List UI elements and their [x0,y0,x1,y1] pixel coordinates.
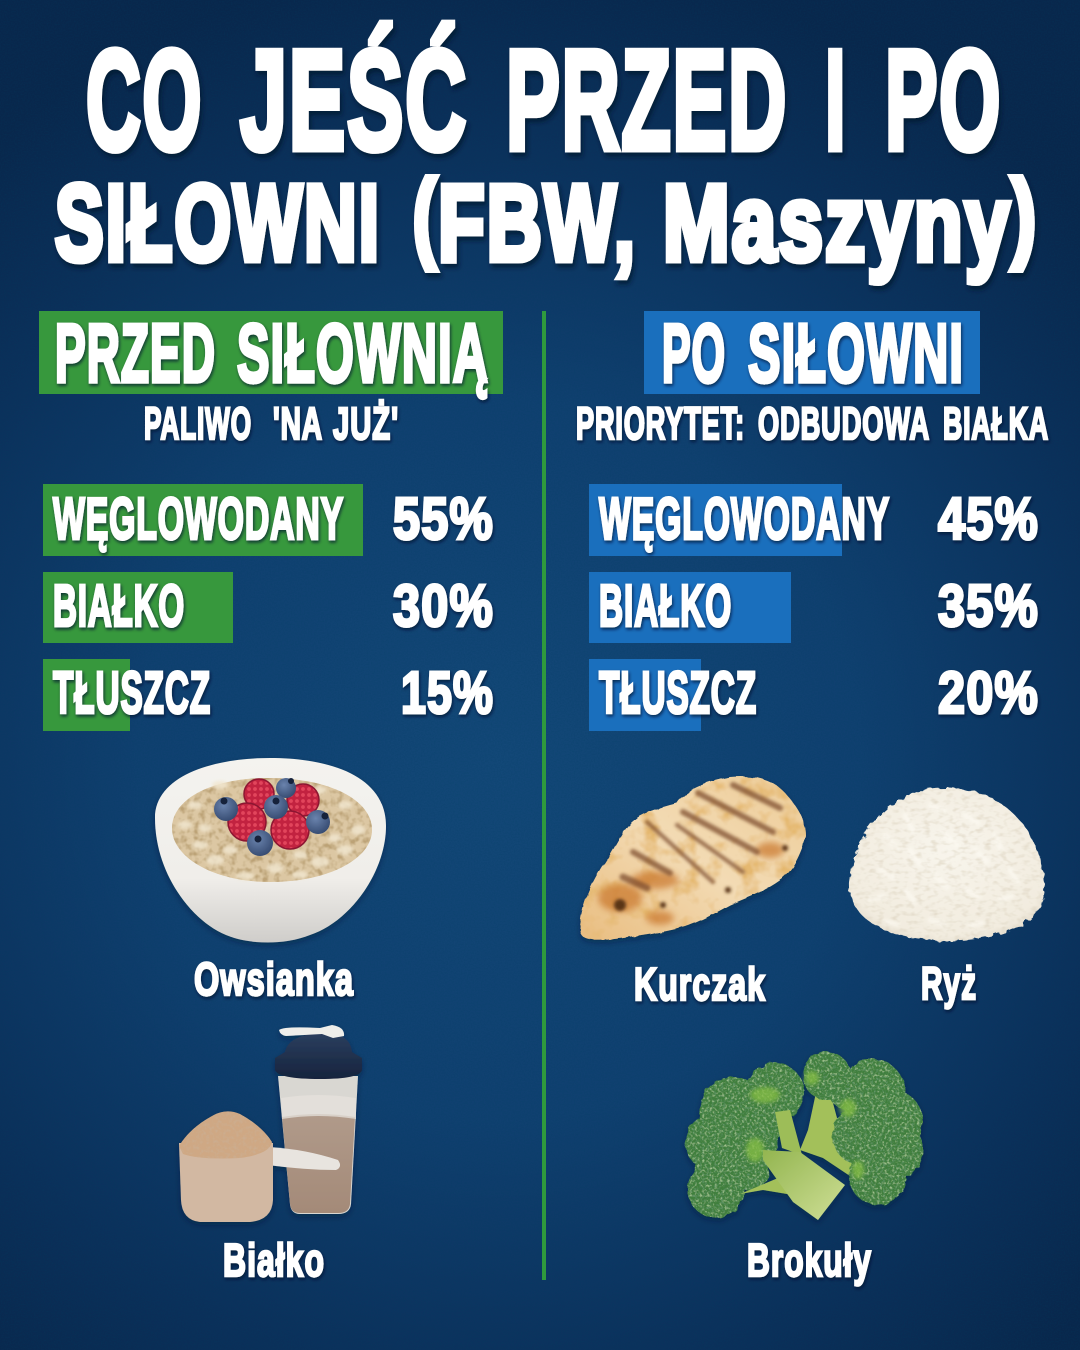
label: białko: Białko [223,1234,325,1286]
icon: broccoli [685,1052,923,1220]
macro bar: tłuszcz 20%: 20% [938,660,1039,726]
heading: przed siłownią: SIŁOWNIĄ [237,306,489,400]
subheading: priorytet: ODBUDOWA [758,398,930,449]
macro bar: białko 30%: BIAŁKO [53,573,185,639]
heading: po siłowni: PO [662,306,726,400]
panel: po siłowni [576,306,1049,1286]
macro bar: białko 35%: BIAŁKO [599,573,732,639]
title: CO [86,21,203,180]
label: brokuły: Brokuły [747,1234,872,1286]
label: kurczak: Kurczak [634,958,766,1010]
macro bar: białko 35% [589,572,1039,643]
panel: przed siłownią [39,306,503,1286]
title: I [825,21,847,180]
macro bar: węglowodany 55%: WĘGLOWODANY [53,486,344,552]
title: ( [413,160,438,270]
label: owsianka: Owsianka [194,953,354,1005]
macro bar: tłuszcz 15% [43,659,494,731]
heading: przed siłownią [39,306,503,400]
subheading: priorytet [576,398,1049,449]
center divider [542,311,546,1280]
icon: rice mound [849,788,1045,941]
blueberries [214,778,330,856]
icon: grilled chicken [580,776,806,940]
macro bar: białko 30%: 30% [393,573,494,639]
title: JEŚĆ [240,21,468,180]
title: FBW, [438,162,637,283]
title [55,21,1038,283]
subheading: paliwo na już: PALIWO [144,398,252,449]
macro bar: tłuszcz 20%: TŁUSZCZ [599,660,757,726]
label: ryż: Ryż [921,957,977,1009]
icon: protein shaker and scoop [179,1025,362,1222]
title: SIŁOWNI [55,162,381,283]
subheading: priorytet: PRIORYTET: [576,398,745,449]
macro bar: białko 30% [43,572,494,643]
macro bar: tłuszcz 15%: 15% [401,660,494,726]
subheading: paliwo na już: 'NA [273,398,323,449]
heading: przed siłownią: PRZED [55,306,216,400]
icon: oatmeal bowl [155,758,386,942]
macro bar: węglowodany 45%: 45% [938,486,1039,552]
title: PRZED [506,21,788,180]
raspberries [228,779,319,849]
title: ) [1012,160,1038,270]
macro bar: białko 35%: 35% [938,573,1039,639]
subheading: paliwo na już: JUŻ' [333,398,399,449]
macro bar: tłuszcz 20% [589,659,1039,731]
macro bar: węglowodany 55%: 55% [393,486,494,552]
heading: po siłowni [644,306,980,400]
macro bar: tłuszcz 15%: TŁUSZCZ [53,660,211,726]
